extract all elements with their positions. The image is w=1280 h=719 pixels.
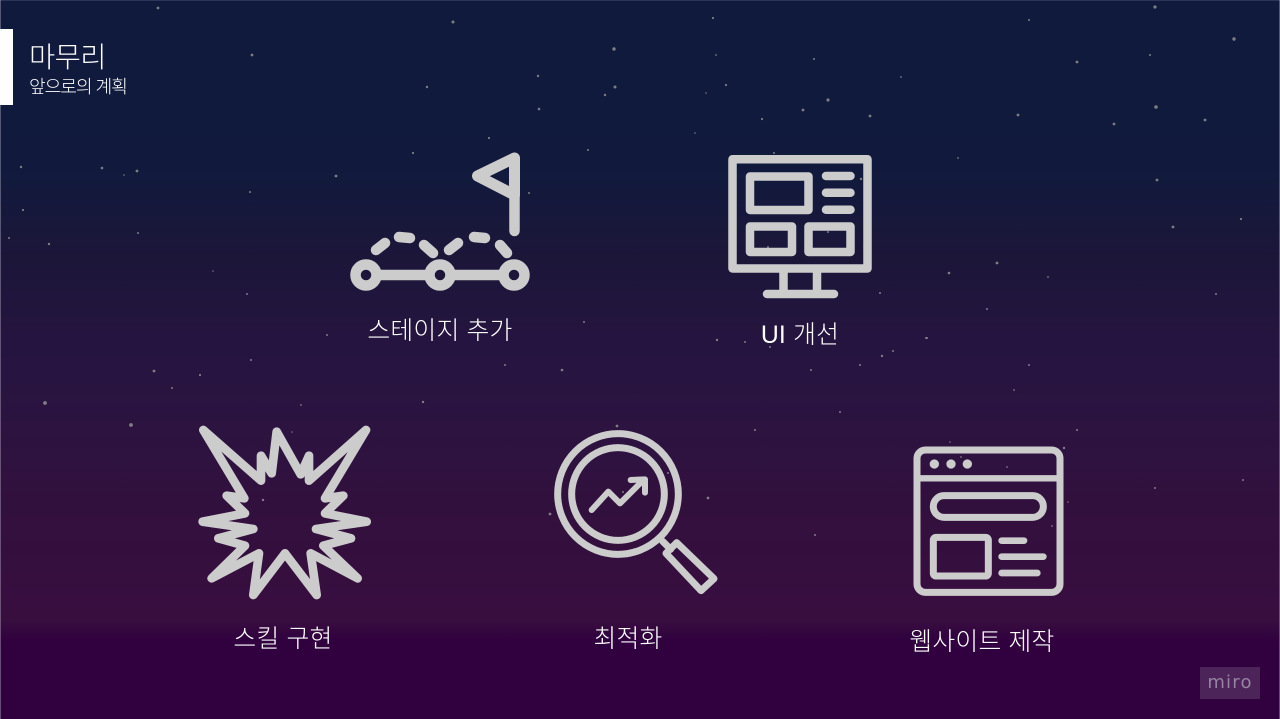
subheading: 앞으로의 계획 xyxy=(29,77,127,97)
label: UI improvement: UI 개선 xyxy=(761,322,839,349)
icon: magnifier with trend arrow xyxy=(554,430,718,594)
title block xyxy=(29,42,127,97)
icon: website window xyxy=(914,446,1064,596)
icon: stage path with flag xyxy=(350,152,530,291)
label: website production: 웹사이트 제작 xyxy=(909,629,1055,656)
icon: skill explosion xyxy=(198,426,371,600)
icon: monitor UI xyxy=(728,155,872,298)
edge highlight lines xyxy=(0,0,1280,1)
watermark: miro xyxy=(1200,667,1260,699)
label: skill implementation: 스킬 구현 xyxy=(233,626,333,653)
title accent bar xyxy=(0,29,13,105)
label: add stages: 스테이지 추가 xyxy=(367,318,513,345)
heading: 마무리 xyxy=(29,42,106,74)
watermark: miro: miro xyxy=(1207,672,1253,693)
label: optimization: 최적화 xyxy=(593,626,663,653)
